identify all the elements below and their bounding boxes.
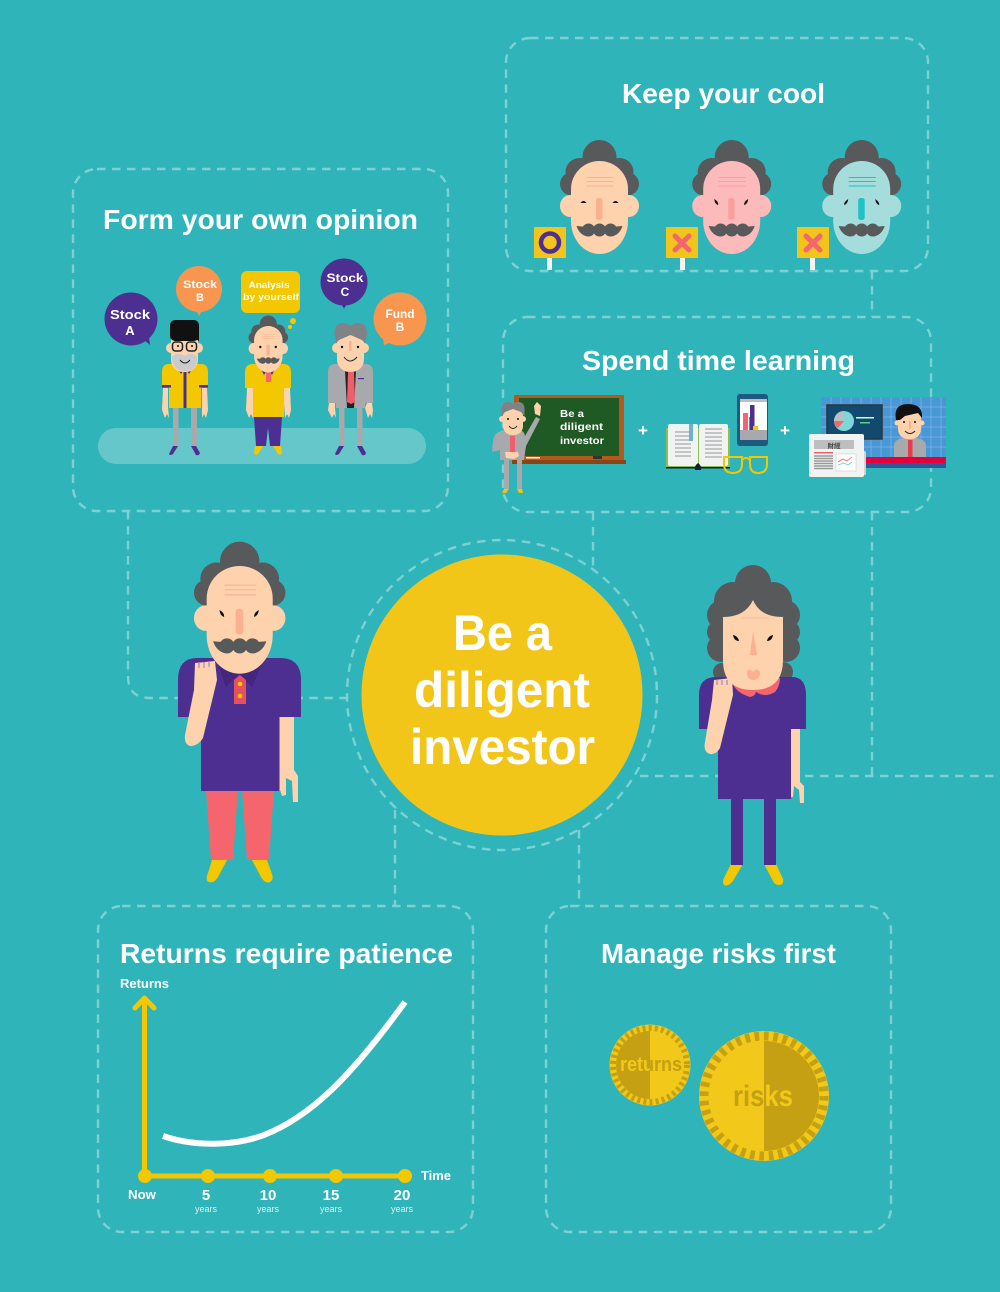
heading: spend time learning: Spend time learning bbox=[582, 345, 855, 376]
bubble: stock C: C bbox=[341, 285, 350, 299]
coin: returns: returns bbox=[620, 1054, 682, 1076]
teacher bbox=[492, 402, 541, 493]
heading: manage risks first: Manage risks first bbox=[601, 938, 836, 969]
sign: cross bbox=[666, 227, 698, 270]
line chart: years bbox=[195, 1204, 218, 1214]
line chart: years bbox=[320, 1204, 342, 1214]
ground bbox=[98, 428, 426, 464]
bubble: fund B bbox=[374, 292, 426, 346]
line chart: 15 bbox=[323, 1187, 339, 1204]
title: Be a bbox=[453, 605, 553, 661]
bubble: analysis by yourself bbox=[241, 271, 300, 329]
dashed ring bbox=[347, 540, 657, 850]
plus: + bbox=[780, 421, 790, 440]
line chart: Now bbox=[128, 1187, 157, 1202]
person: grey suit bbox=[328, 323, 373, 455]
panel: keep your cool bbox=[506, 38, 928, 271]
central circle bbox=[362, 554, 642, 836]
newspaper bbox=[809, 434, 866, 477]
line chart bbox=[120, 976, 451, 1214]
face: angry pink bbox=[692, 140, 771, 254]
plus: + bbox=[638, 421, 648, 440]
line chart: 20 bbox=[394, 1187, 410, 1204]
bubble: stock C: Stock bbox=[326, 271, 364, 285]
bubble: stock A bbox=[104, 292, 158, 346]
heading: returns require patience: Returns require patience bbox=[120, 938, 453, 969]
TV news bbox=[821, 397, 946, 468]
panel: returns require patience bbox=[98, 906, 473, 1232]
title: diligent bbox=[414, 662, 590, 718]
title bbox=[410, 605, 595, 775]
character: man bbox=[178, 542, 301, 882]
coin: risks bbox=[699, 1031, 829, 1161]
bubble: fund B: Fund bbox=[386, 307, 414, 321]
bubble: stock A: Stock bbox=[110, 307, 151, 322]
coin: risks: risks bbox=[733, 1080, 793, 1113]
title: investor bbox=[410, 719, 595, 775]
line chart: years bbox=[391, 1204, 414, 1214]
bubble: stock A: A bbox=[125, 323, 135, 338]
blackboard bbox=[512, 395, 626, 464]
phone chart bbox=[737, 394, 768, 446]
panel: form your own opinion bbox=[73, 169, 448, 511]
dashed connectors bbox=[128, 271, 1000, 906]
heading: keep your cool: Keep your cool bbox=[622, 78, 825, 109]
line chart: years bbox=[257, 1204, 280, 1214]
panel: spend time learning bbox=[492, 317, 946, 512]
line chart: 10 bbox=[260, 1187, 276, 1204]
glasses bbox=[724, 457, 767, 473]
person: glasses and beard bbox=[162, 320, 208, 455]
bubble: stock B bbox=[176, 266, 222, 316]
sign: cross bbox=[797, 227, 829, 270]
face: calm bbox=[560, 140, 639, 254]
coin: returns: returns bbox=[620, 1054, 682, 1076]
coin: risks: risks bbox=[733, 1080, 793, 1113]
line chart: 5 bbox=[202, 1187, 210, 1204]
bubble: analysis by yourself: by yourself bbox=[243, 292, 300, 303]
bubble: stock B: B bbox=[196, 292, 204, 304]
heading: form your own opinion: Form your own opinion bbox=[103, 204, 418, 235]
blackboard: diligent bbox=[560, 421, 604, 433]
bubble: analysis by yourself: Analysis bbox=[248, 280, 290, 291]
blackboard: Be a bbox=[560, 408, 584, 420]
line chart: Time bbox=[421, 1168, 451, 1183]
person: moustache man bbox=[245, 316, 291, 455]
newspaper: 財經 bbox=[828, 441, 841, 450]
coin: returns bbox=[610, 1024, 690, 1106]
face: scared teal bbox=[822, 140, 901, 254]
y-axis label: Returns bbox=[120, 976, 169, 991]
character: woman bbox=[699, 565, 806, 886]
bubble: fund B: B bbox=[396, 320, 405, 334]
bubble: stock C bbox=[320, 258, 368, 309]
bubble: stock B: Stock bbox=[183, 279, 218, 291]
blackboard: investor bbox=[560, 435, 604, 447]
sign: circle bbox=[534, 227, 566, 270]
book bbox=[666, 424, 730, 470]
panel: manage risks first bbox=[546, 906, 891, 1232]
